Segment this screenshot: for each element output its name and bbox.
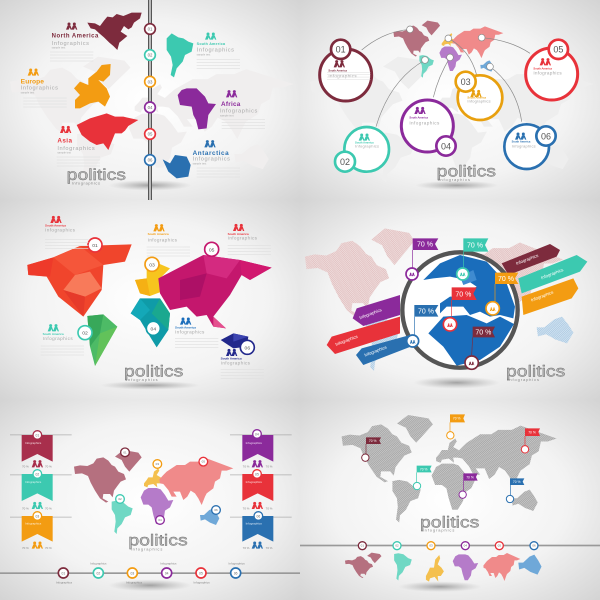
flag pins: 70 % xyxy=(467,243,483,250)
timeline: 02 xyxy=(395,544,399,548)
label 02: South America xyxy=(43,332,64,336)
banner 05: Infographics xyxy=(246,480,262,484)
hatched world map xyxy=(342,415,557,523)
callout 01: 01 xyxy=(336,45,346,55)
callout 05 xyxy=(526,40,578,100)
flag pins: 70 % xyxy=(528,430,536,434)
bottom timeline: 01 xyxy=(61,571,65,575)
callout 04: Infographics xyxy=(409,120,440,125)
banner 02 xyxy=(22,470,53,510)
timeline: 06 xyxy=(532,544,536,548)
title: politics: politics xyxy=(506,364,565,381)
ribbons left: Infographics xyxy=(359,307,382,320)
bottom timeline: Infographics xyxy=(160,561,177,565)
ribbons right: Infographics xyxy=(530,289,554,303)
timeline spine xyxy=(148,0,152,200)
bottom timeline: Infographics xyxy=(56,580,73,584)
banner 03: 03 xyxy=(35,514,39,518)
banner shadows xyxy=(10,434,292,518)
label: Asia xyxy=(57,126,100,166)
callout 03: South America xyxy=(467,96,487,100)
panel: globe with ribbons xyxy=(300,200,600,400)
connector arcs xyxy=(362,29,530,127)
label 06: Infographics xyxy=(221,361,251,366)
title: politics: politics xyxy=(124,364,183,381)
flag pins: 70 % xyxy=(513,480,520,484)
map markers: 03 xyxy=(156,462,159,466)
map: Asia xyxy=(77,113,138,150)
label: Europe: Infographics xyxy=(21,85,58,91)
banner 06: 06 xyxy=(256,514,260,518)
bottom timeline: 04 xyxy=(165,571,169,575)
globe xyxy=(402,252,518,368)
world map xyxy=(74,450,233,534)
label 04: South America xyxy=(175,325,196,329)
map number badges: 02 xyxy=(82,331,88,337)
ribbons right xyxy=(502,244,587,315)
flag pins xyxy=(406,238,518,369)
panel: banners and timeline xyxy=(0,400,300,600)
bottom timeline: 05 xyxy=(199,571,203,575)
flag pins: 70 % xyxy=(498,276,514,283)
bottom timeline: Infographics xyxy=(194,580,210,584)
bottom timeline: 06 xyxy=(234,571,238,575)
label 04 xyxy=(175,317,218,348)
timeline nodes: 05 xyxy=(148,132,153,137)
label: Antarctica xyxy=(193,140,240,177)
map: Europe xyxy=(74,64,111,108)
label: North America xyxy=(50,22,99,61)
label 05 xyxy=(228,224,271,255)
callout 05: Infographics xyxy=(533,71,562,76)
callout 01: South America xyxy=(328,69,348,73)
map markers: 02 xyxy=(118,497,122,501)
banner 05 xyxy=(242,470,273,510)
callout 03: Infographics xyxy=(467,99,491,104)
timeline nodes: 06 xyxy=(148,158,153,163)
label: Europe xyxy=(21,68,67,107)
label: Africa: Infographics xyxy=(220,109,258,115)
panel: hatched world map with flags xyxy=(300,400,600,600)
label 01 xyxy=(45,216,88,249)
label: North America: Infographics xyxy=(52,41,89,47)
flag pins: 70 % xyxy=(417,242,433,249)
label: Europe: sample text xyxy=(21,90,35,94)
timeline nodes: 04 xyxy=(148,105,153,110)
flag pins: 70 % xyxy=(420,467,427,471)
polygon: Africa xyxy=(131,298,170,347)
ribbons right: Infographics xyxy=(515,253,539,266)
timeline xyxy=(300,542,600,550)
title: politics: politics xyxy=(67,167,126,184)
label 06 xyxy=(221,349,264,379)
banner 03: 70 % xyxy=(45,546,52,550)
world map xyxy=(393,21,503,78)
label: Asia: Asia xyxy=(57,137,72,144)
callout 06: 06 xyxy=(541,131,551,141)
flag pins: 70 % xyxy=(455,291,471,298)
banner 04: 70 % xyxy=(243,465,250,469)
polygon: South America xyxy=(87,314,117,366)
map: South America xyxy=(167,33,193,77)
label 01: Infographics xyxy=(45,228,76,233)
label: North America: North America xyxy=(52,33,99,39)
banner 05: 05 xyxy=(255,472,259,476)
map markers: 06 xyxy=(214,508,218,512)
callout 05: 05 xyxy=(553,45,563,55)
label: Africa: Africa xyxy=(221,101,241,108)
timeline nodes: 03 xyxy=(148,79,153,84)
banner 03 xyxy=(22,512,53,550)
callout 01 xyxy=(320,40,372,101)
banner 01: 01 xyxy=(35,433,39,437)
label: South America xyxy=(197,32,240,69)
banner 03: 70 % xyxy=(22,546,29,550)
map: Antarctica xyxy=(163,155,191,178)
banner 01: Infographics xyxy=(25,441,42,445)
banner 03: Infographics xyxy=(25,522,42,526)
label 05: Infographics xyxy=(228,236,258,241)
flag pins xyxy=(362,414,540,503)
title: politics: Infographics xyxy=(438,177,470,182)
callout 01: Infographics xyxy=(328,73,357,78)
label: North America: sample text xyxy=(52,46,66,50)
bottom timeline: 03 xyxy=(130,571,134,575)
callout 04: 04 xyxy=(441,141,451,151)
title: politics: politics xyxy=(128,533,188,550)
banner 01: 70 % xyxy=(45,465,52,469)
banner 04: Infographics xyxy=(246,441,262,445)
title: politics: politics xyxy=(437,164,496,181)
label 03: South America xyxy=(148,232,169,236)
label 04: Infographics xyxy=(175,329,205,334)
label: Africa: sample text xyxy=(220,114,234,118)
label: Antarctica: Antarctica xyxy=(193,150,229,157)
timeline: 05 xyxy=(498,544,501,548)
callout 02 xyxy=(335,127,389,172)
title: politics: Infographics xyxy=(126,377,158,382)
label: South America: Infographics xyxy=(197,48,234,54)
map number badges xyxy=(78,238,254,354)
ribbons left xyxy=(327,295,415,365)
map number badges: 06 xyxy=(245,345,250,351)
label 05: South America xyxy=(228,232,249,236)
map markers: 05 xyxy=(202,460,205,464)
flag pins: 70 % xyxy=(369,439,376,443)
banner 04 xyxy=(242,430,273,469)
label 01: South America xyxy=(45,223,66,227)
title: politics: Infographics xyxy=(131,546,162,551)
callout 05: South America xyxy=(533,66,553,70)
label: Asia: Infographics xyxy=(57,146,95,152)
banner 02: Infographics xyxy=(25,480,42,484)
panel: continents timeline xyxy=(0,0,300,200)
label: Africa xyxy=(220,90,265,129)
title: politics: Infographics xyxy=(423,528,454,533)
callout 02: 02 xyxy=(340,157,350,167)
callout 06: South America xyxy=(512,140,531,144)
title: politics: Infographics xyxy=(72,180,100,185)
map markers xyxy=(407,26,493,70)
map number badges: 05 xyxy=(209,247,215,253)
banner 04: 04 xyxy=(255,432,259,436)
banner 05: 70 % xyxy=(266,506,273,510)
callout 02: South America xyxy=(355,140,374,144)
map markers xyxy=(116,448,220,524)
map number badges: 01 xyxy=(92,243,98,249)
banner 01: 70 % xyxy=(22,465,29,469)
timeline: 03 xyxy=(429,544,433,548)
flag pins: 70 % xyxy=(475,330,491,337)
map markers: 04 xyxy=(158,518,162,522)
callout 03: 03 xyxy=(461,77,471,87)
flag pins: 70 % xyxy=(466,475,474,479)
polygon: North America xyxy=(27,244,132,317)
polygon: Asia xyxy=(158,255,272,328)
banner 05: 70 % xyxy=(243,506,250,510)
label 02 xyxy=(41,324,84,355)
flag pins: 70 % xyxy=(453,417,460,421)
ribbons left: Infographics xyxy=(364,344,387,358)
flag pins: 70 % xyxy=(418,309,434,316)
timeline nodes xyxy=(145,24,155,165)
banner 06: Infographics xyxy=(246,522,262,526)
label 06: South America xyxy=(221,357,242,361)
map markers: 01 xyxy=(123,450,127,454)
bottom timeline: Infographics xyxy=(126,580,143,584)
banner 02: 70 % xyxy=(45,506,52,510)
bottom timeline: Infographics xyxy=(229,561,245,565)
hatched world map xyxy=(305,228,573,371)
banner 04: 70 % xyxy=(266,465,273,469)
timeline: 04 xyxy=(464,544,467,548)
title: politics: politics xyxy=(420,514,479,531)
ribbons right: Infographics xyxy=(540,267,564,280)
polygon: Europe xyxy=(135,262,170,296)
label: Antarctica: Infographics xyxy=(193,157,230,163)
continent row xyxy=(345,553,542,582)
panel: circle callouts map xyxy=(300,0,600,200)
panel: polygon world map xyxy=(0,200,300,400)
label 02: Infographics xyxy=(43,336,73,341)
ribbons left: Infographics xyxy=(335,334,358,347)
banner 06: 70 % xyxy=(243,546,250,550)
map number badges: 04 xyxy=(151,326,156,332)
bottom timeline xyxy=(0,561,300,584)
label: Antarctica: sample text xyxy=(193,161,207,165)
label: South America: South America xyxy=(197,42,226,46)
callout 03 xyxy=(456,72,502,120)
timeline nodes: 01 xyxy=(148,27,153,32)
callout 06 xyxy=(504,124,556,169)
banner 01 xyxy=(22,431,53,469)
bottom timeline: 02 xyxy=(96,571,100,575)
banner 06 xyxy=(242,512,273,550)
map: Africa xyxy=(178,88,216,129)
label: Asia: sample text xyxy=(57,150,71,154)
banner 02: 02 xyxy=(35,472,39,476)
callout 04 xyxy=(401,100,456,156)
map: North America xyxy=(87,13,142,50)
polygon: Australia xyxy=(221,333,248,348)
callout 06: Infographics xyxy=(512,143,536,148)
title: politics: Infographics xyxy=(507,377,539,382)
timeline nodes: 02 xyxy=(148,53,153,58)
banner 06: 70 % xyxy=(266,546,273,550)
label: Europe: Europe xyxy=(21,78,44,85)
bottom timeline: Infographics xyxy=(90,561,107,565)
callout 04: South America xyxy=(409,115,429,119)
banner 02: 70 % xyxy=(22,506,29,510)
timeline: 01 xyxy=(361,544,364,548)
label 03: Infographics xyxy=(148,237,178,242)
callout 02: Infographics xyxy=(355,144,379,149)
label 03 xyxy=(147,224,190,256)
map number badges: 03 xyxy=(149,262,155,268)
label: South America: sample text xyxy=(197,52,211,56)
